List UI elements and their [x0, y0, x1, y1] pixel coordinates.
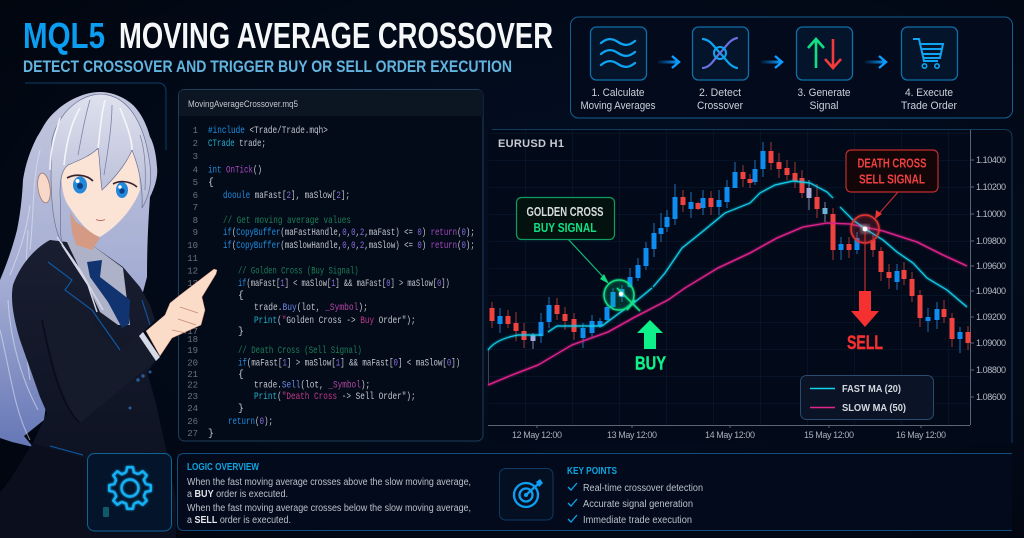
file name: MovingAverageCrossover.mq5 — [188, 99, 298, 110]
step 4: execute trade order: Trade Order — [901, 100, 957, 112]
price axis: 1.09800 — [976, 236, 1006, 246]
source code: } — [208, 428, 214, 439]
source code: int OnTick() — [208, 165, 262, 176]
price axis: 1.09000 — [976, 338, 1006, 348]
price axis: 1.10400 — [976, 155, 1006, 165]
source code: // Death Cross (Sell Signal) — [238, 345, 362, 356]
hair highlights — [50, 100, 132, 170]
arrow — [761, 56, 782, 68]
subtitle: DETECT CROSSOVER AND TRIGGER BUY OR SELL ORDER EXECUTION — [23, 57, 512, 76]
price axis: 1.09400 — [976, 286, 1006, 296]
line numbers: 26 — [187, 417, 198, 427]
line numbers: 16 — [187, 316, 198, 326]
ear — [36, 172, 52, 204]
death cross marker — [851, 215, 879, 243]
time axis labels: 16 May 12:00 — [896, 430, 946, 440]
line numbers: 7 — [193, 203, 198, 213]
line numbers: 14 — [187, 291, 198, 301]
buy arrow — [635, 320, 666, 374]
key points — [567, 465, 703, 526]
sleeve shading — [38, 300, 158, 423]
step 2: detect crossover: 2. Detect — [699, 87, 741, 99]
line numbers: 19 — [187, 346, 198, 356]
time axis labels: 15 May 12:00 — [804, 430, 854, 440]
key points: Immediate trade execution — [583, 515, 692, 526]
source code: Print("Death Cross -> Sell Order"); — [254, 391, 416, 402]
source code: return(0); — [228, 416, 273, 427]
panel: price chart — [488, 129, 1012, 443]
source code: // Get moving average values — [223, 215, 351, 226]
line numbers: 24 — [187, 404, 198, 414]
cuff — [139, 332, 160, 361]
code panel header — [179, 90, 483, 116]
logic overview: When the fast moving average crosses above the slow moving average, — [187, 477, 471, 488]
line numbers: 11 — [187, 254, 198, 264]
front lock — [57, 237, 103, 312]
line numbers: 2 — [193, 139, 198, 149]
shirt — [66, 240, 130, 325]
source code: if(CopyBuffer(maFastHandle,0,0,2,maFast) <= 0) return(0); — [223, 227, 475, 238]
source code — [208, 125, 475, 439]
line numbers: 10 — [187, 241, 198, 251]
line numbers: 13 — [187, 279, 198, 289]
hair strands — [0, 150, 40, 440]
source code: if(maFast[1] < maSlow[1] && maFast[0] > maSlow[0]) — [238, 278, 450, 289]
hand pointing — [146, 269, 217, 356]
source code: { — [238, 369, 244, 380]
right eye — [113, 182, 137, 198]
step 3: generate signal: 3. Generate — [798, 87, 850, 99]
step 1: calculate moving averages: Moving Averages — [580, 100, 656, 112]
logic overview — [187, 461, 471, 526]
line numbers: 4 — [193, 166, 198, 176]
line numbers: 5 — [193, 178, 198, 188]
panel: bottom information strip — [178, 454, 1012, 530]
line numbers: 6 — [193, 191, 198, 201]
time axis labels: 12 May 12:00 — [512, 430, 562, 440]
line numbers: 3 — [193, 152, 198, 162]
legend: FAST MA (20) — [842, 384, 901, 395]
callout: golden cross: BUY SIGNAL — [534, 221, 597, 235]
logic overview: LOGIC OVERVIEW — [187, 461, 259, 473]
source code: if(CopyBuffer(maSlowHandle,0,0,2,maSlow) <= 0) return(0); — [223, 240, 475, 251]
callout: golden cross — [516, 198, 614, 284]
price axis: 1.10200 — [976, 182, 1006, 192]
legend — [800, 376, 934, 420]
jacket buttons — [128, 370, 152, 410]
buy arrow: BUY — [635, 354, 666, 374]
legend: SLOW MA (50) — [842, 403, 906, 414]
line numbers: 17 — [187, 327, 198, 337]
source code: { — [208, 177, 214, 188]
arrow — [658, 56, 679, 68]
callout: death cross: SELL SIGNAL — [859, 172, 925, 186]
price axis: 1.09200 — [976, 312, 1006, 322]
panel: gear icon — [88, 454, 172, 531]
line numbers: 12 — [187, 266, 198, 276]
title — [23, 15, 553, 56]
callout: golden cross: GOLDEN CROSS — [526, 205, 604, 219]
slow moving average line — [488, 223, 967, 385]
callout: death cross: DEATH CROSS — [858, 156, 926, 170]
source code: trade.Buy(lot, _Symbol); — [254, 302, 368, 313]
line numbers: 9 — [193, 228, 198, 238]
finger lines — [172, 307, 198, 333]
source code: { — [238, 290, 244, 301]
price axis: 1.08600 — [976, 392, 1006, 402]
skirt panel — [0, 443, 172, 538]
fast moving average line — [488, 181, 967, 350]
panel: code editor — [178, 90, 483, 441]
line numbers: 22 — [187, 380, 198, 390]
step 3: generate signal — [796, 27, 852, 112]
title: MQL5 — [23, 15, 105, 56]
logic overview: a BUY order is executed. — [187, 489, 288, 500]
line numbers: 23 — [187, 392, 198, 402]
source code: // Golden Cross (Buy Signal) — [238, 266, 359, 277]
source code: } — [238, 403, 244, 414]
line numbers: 1 — [193, 126, 198, 136]
logic overview: When the fast moving average crosses below the slow moving average, — [187, 503, 471, 514]
golden cross marker — [604, 280, 640, 311]
line numbers: 27 — [187, 429, 198, 439]
candlesticks — [492, 142, 968, 353]
source code: #include <Trade/Trade.mqh> — [208, 125, 328, 136]
step 1: calculate moving averages: 1. Calculate — [592, 87, 644, 99]
callout: death cross — [846, 150, 938, 219]
line numbers: 18 — [187, 335, 198, 345]
lapel trim — [48, 262, 150, 455]
source code: Print("Golden Cross -> Buy Order"); — [254, 315, 416, 326]
arrow — [865, 56, 886, 68]
sell arrow — [847, 232, 883, 354]
icon: target — [500, 468, 553, 520]
time axis labels: 14 May 12:00 — [705, 430, 755, 440]
key points: KEY POINTS — [567, 465, 617, 477]
left eye — [67, 175, 93, 194]
key points: Accurate signal generation — [583, 499, 693, 510]
neck shadow — [70, 212, 100, 250]
price axis: 1.09600 — [976, 261, 1006, 271]
panel: process flow — [570, 17, 1012, 118]
key points: Real-time crossover detection — [583, 483, 703, 494]
tie — [87, 260, 130, 328]
jacket and skirt — [0, 240, 176, 538]
sell arrow: SELL — [847, 333, 883, 354]
line numbers: 15 — [187, 303, 198, 313]
source code: dooule maFast[2], maSlow[2]; — [223, 190, 350, 201]
mouth — [96, 220, 105, 221]
title: MOVING AVERAGE CROSSOVER — [119, 15, 553, 56]
step 4: execute trade order — [901, 27, 958, 112]
step 2: detect crossover: Crossover — [697, 100, 743, 112]
source code: if(maFast[1] > maSlow[1] && maFast[0] < maSlow[0]) — [238, 358, 460, 369]
source code: CTrade trade; — [208, 138, 266, 149]
character illustration — [0, 92, 217, 538]
price axis: 1.10000 — [976, 209, 1006, 219]
step 3: generate signal: Signal — [810, 100, 838, 112]
face — [61, 150, 140, 237]
price axis — [488, 130, 1006, 428]
line numbers: 20 — [187, 358, 198, 368]
source code: trade.Sell(lot, _Symbol); — [254, 380, 370, 391]
step 2: detect crossover — [692, 27, 748, 112]
step 1: calculate moving averages — [580, 27, 656, 112]
line numbers — [187, 126, 198, 439]
price axis: 1.08800 — [976, 365, 1006, 375]
source code: } — [238, 326, 244, 337]
chart symbol label: EURUSD H1 — [498, 138, 564, 150]
step 4: execute trade order: 4. Execute — [905, 87, 953, 99]
front bangs — [51, 94, 151, 245]
time axis labels: 13 May 12:00 — [607, 430, 657, 440]
line numbers: 8 — [193, 216, 198, 226]
logic overview: a SELL order is executed. — [187, 515, 291, 526]
time axis labels — [512, 430, 946, 440]
back hair — [0, 92, 157, 447]
line numbers: 21 — [187, 370, 198, 380]
